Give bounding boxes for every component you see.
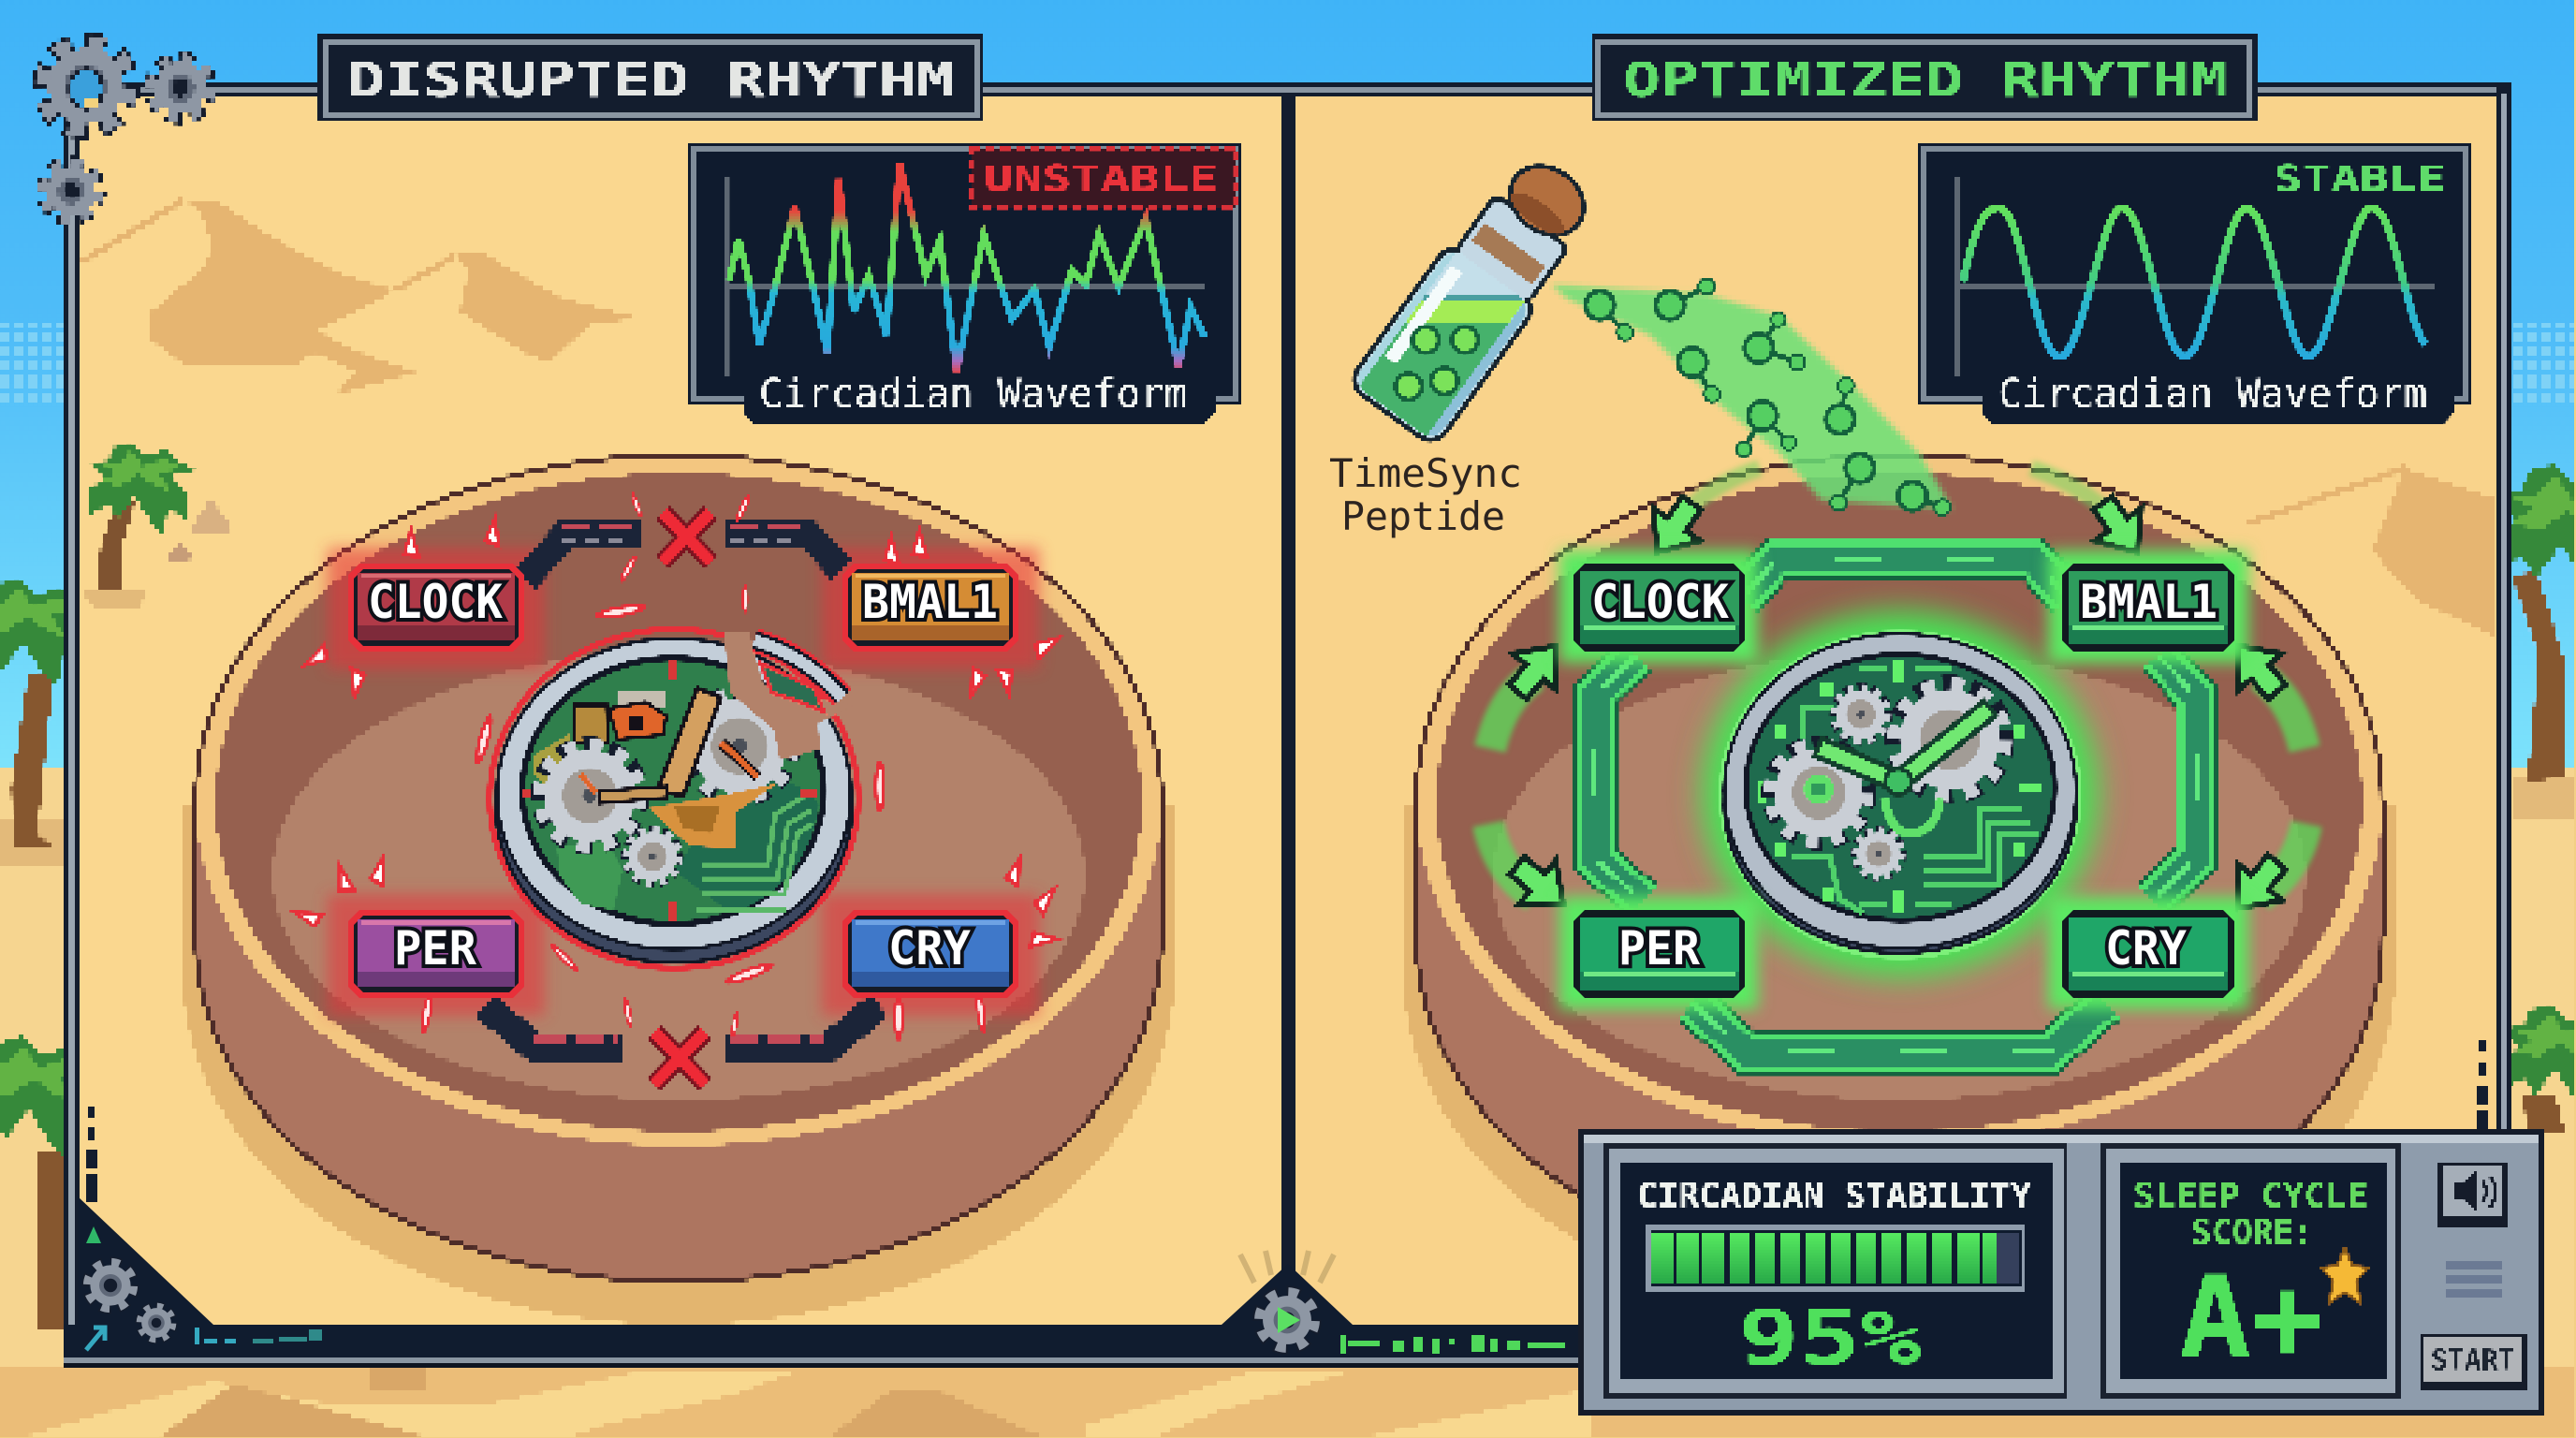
gene pill: PER disrupted [348, 910, 524, 998]
gene pill: PER disrupted: PER [394, 921, 477, 976]
heading: sleep cycle score: SCORE: [2191, 1212, 2314, 1253]
palm tree and rocks [81, 442, 232, 609]
green direction arrows [1497, 487, 2298, 926]
value: A+: A+ [2179, 1252, 2323, 1385]
label: TimeSync Peptide [1329, 450, 1522, 539]
broken clock [490, 629, 858, 968]
palm: right outside frame upper [2491, 463, 2576, 782]
synced clock [1719, 630, 2082, 960]
gene pill: PER optimized [1573, 910, 1745, 998]
green glow crescents around the cycle [1488, 468, 2306, 897]
heading: sleep cycle score [2133, 1176, 2368, 1253]
gene pill: CRY optimized [2062, 910, 2234, 998]
cell base [183, 455, 1175, 1325]
octagon circuit connector [1595, 559, 2197, 1052]
icon: red X top [663, 513, 710, 562]
badge: UNSTABLE: UNSTABLE [984, 158, 1218, 199]
green status readout [1340, 1335, 1565, 1354]
clock glow [1702, 610, 2099, 977]
gene pill: CRY optimized: CRY [2105, 921, 2187, 976]
panel: circadian stability meter [1604, 1143, 2068, 1398]
heading: disrupted rhythm [318, 35, 984, 122]
axis label: Circadian Waveform [759, 371, 1188, 418]
icon: top-left gears [42, 42, 211, 219]
gene pill: CRY disrupted [842, 910, 1018, 998]
button: speaker [2437, 1162, 2508, 1226]
heading: optimized rhythm [1592, 35, 2257, 122]
gene pill: CLOCK disrupted: CLOCK [368, 575, 503, 629]
badge: UNSTABLE [971, 148, 1237, 207]
progress bar [1646, 1224, 2026, 1293]
gene pill: CRY disrupted: CRY [888, 921, 971, 976]
debris [534, 688, 793, 884]
badge: STABLE: STABLE [2274, 158, 2446, 199]
palm: right outside frame lower [2499, 1004, 2576, 1133]
broken connectors [485, 527, 879, 1047]
label: TimeSync Peptide: TimeSync [1329, 450, 1522, 496]
circuit traces [1793, 669, 2039, 913]
gene pill: BMAL1 disrupted: BMAL1 [862, 575, 998, 629]
heading: sleep cycle score: SLEEP CYCLE [2133, 1176, 2368, 1216]
heading: circadian stability: CIRCADIAN STABILITY [1637, 1176, 2032, 1216]
gene pill: BMAL1 optimized: BMAL1 [2080, 575, 2217, 629]
glowing peptide stream [1551, 285, 1953, 509]
dunes [81, 199, 640, 395]
palm: left outside frame lower [0, 1035, 112, 1329]
cell base [1403, 455, 2395, 1325]
icon: center play gear [1240, 1251, 1334, 1348]
red pill halos [328, 548, 1039, 1016]
icon: red X bottom [654, 1033, 705, 1084]
pill glows [1559, 550, 2248, 1009]
palm: left outside frame upper [0, 578, 97, 847]
panel: dashboard [1579, 1130, 2544, 1416]
clock hands [1816, 707, 1992, 795]
disrupted gene network [285, 492, 1069, 1084]
button: start [2420, 1333, 2527, 1389]
heading: optimized rhythm: OPTIMIZED RHYTHM [1623, 53, 2228, 109]
red sparks [285, 492, 1069, 1041]
axis label right: Circadian Waveform [1998, 371, 2427, 418]
label: TimeSync Peptide: Peptide [1341, 493, 1505, 539]
panel: sleep cycle score [2100, 1143, 2401, 1398]
heading: disrupted rhythm: DISRUPTED RHYTHM [347, 53, 955, 109]
grille lines [2446, 1262, 2502, 1297]
gene pill: BMAL1 optimized [2062, 564, 2234, 652]
panel: optimized rhythm scene [1292, 94, 2499, 1329]
panel: disrupted rhythm scene [78, 94, 1285, 1329]
chart: unstable circadian waveform [688, 142, 1240, 424]
icon: TimeSync peptide vial [1352, 163, 1587, 444]
button: start: START [2431, 1344, 2515, 1377]
circuit board detail [522, 659, 819, 921]
gene pill: CLOCK disrupted [348, 564, 524, 652]
optimized gene network [1488, 468, 2306, 1052]
bezel break [724, 632, 854, 760]
value: 95%: 95% [1738, 1295, 1922, 1383]
gene pill: CLOCK optimized: CLOCK [1591, 575, 1729, 629]
chart: stable circadian waveform [1919, 142, 2470, 424]
right dune [2248, 468, 2495, 637]
gene pill: BMAL1 disrupted [842, 564, 1018, 652]
icon: star [2321, 1248, 2368, 1303]
icon: bottom-left gears and status glyphs [86, 1226, 322, 1350]
gene pill: PER optimized: PER [1618, 921, 1701, 976]
gene pill: CLOCK optimized [1573, 564, 1745, 652]
peptide molecules [1586, 279, 1950, 515]
